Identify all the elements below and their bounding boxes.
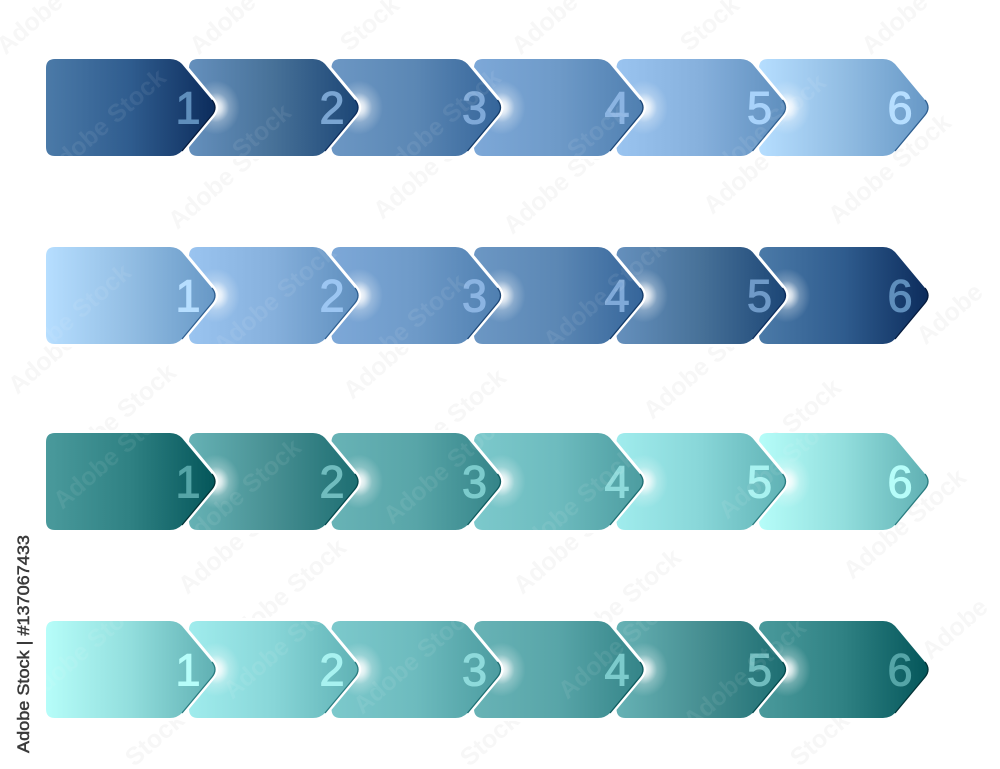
arrow 5 bbox=[616, 59, 810, 156]
arrow 5: 5 bbox=[747, 270, 772, 322]
arrow 2 bbox=[189, 621, 383, 718]
arrow 2 bbox=[189, 59, 383, 156]
watermark layer on background: Adobe Stock bbox=[368, 103, 502, 225]
watermark layer on background: Adobe Stock bbox=[3, 278, 137, 400]
arrow 6 bbox=[759, 247, 928, 344]
arrow 3 bbox=[332, 247, 526, 344]
arrow 3: 3 bbox=[462, 644, 487, 696]
arrow 5 bbox=[616, 433, 810, 530]
arrow 3: 3 bbox=[462, 456, 487, 508]
arrow 1: 1 bbox=[175, 644, 201, 696]
watermark layer on background: Adobe Stock bbox=[173, 478, 307, 600]
watermark layer on background: Adobe Stock bbox=[508, 478, 642, 600]
watermark layer on arrows: Adobe Stock bbox=[373, 63, 507, 185]
arrow 1: 1 bbox=[175, 456, 201, 508]
arrow 6: 6 bbox=[887, 644, 913, 696]
row 1: blue arrows darkening to the left bbox=[46, 59, 928, 156]
arrow 1: 1 bbox=[175, 270, 201, 322]
watermark layer on background: Adobe Stock bbox=[713, 373, 847, 495]
watermark layer on arrows: Adobe Stock bbox=[678, 613, 812, 735]
row 3: teal arrows darkening to the left bbox=[46, 433, 928, 530]
arrow 5 bbox=[616, 621, 810, 718]
watermark layer on arrows bbox=[3, 63, 847, 735]
watermark layer on arrows: Adobe Stock bbox=[553, 583, 687, 705]
watermark layer on background: Adobe Stock bbox=[163, 113, 297, 235]
arrow 2 bbox=[189, 433, 383, 530]
arrow 6: 6 bbox=[887, 456, 913, 508]
watermark layer on background: Adobe Stock bbox=[638, 303, 772, 425]
arrow 6: 6 bbox=[887, 82, 913, 134]
arrow 4 bbox=[474, 621, 668, 718]
watermark layer on arrows: Adobe Stock bbox=[498, 98, 632, 220]
watermark layer on arrows: Adobe Stock bbox=[18, 588, 152, 710]
watermark layer on arrows: Adobe Stock bbox=[378, 408, 512, 530]
watermark layer on arrows: Adobe Stock bbox=[3, 258, 137, 380]
arrow 2: 2 bbox=[319, 270, 345, 322]
watermark layer on arrows: Adobe Stock bbox=[713, 403, 847, 525]
watermark layer on arrows: Adobe Stock bbox=[163, 98, 297, 220]
arrow 5: 5 bbox=[747, 644, 772, 696]
arrow 2: 2 bbox=[319, 644, 345, 696]
arrow 4 bbox=[474, 59, 668, 156]
watermark layer on arrows: Adobe Stock bbox=[348, 598, 482, 720]
arrow 1 bbox=[46, 433, 240, 530]
arrow 5: 5 bbox=[747, 82, 772, 134]
watermark layer on background: Adobe Stock bbox=[338, 283, 472, 405]
watermark layer on arrows: Adobe Stock bbox=[538, 233, 672, 355]
watermark layer on background: Adobe Stock bbox=[498, 118, 632, 240]
arrow 3 bbox=[332, 59, 526, 156]
watermark layer on arrows: Adobe Stock bbox=[508, 443, 642, 565]
arrow 3: 3 bbox=[462, 270, 487, 322]
arrow 6 bbox=[759, 621, 928, 718]
watermark layer on background: Adobe Stock bbox=[838, 463, 972, 585]
watermark layer on background: Adobe Stock bbox=[218, 533, 352, 655]
arrow 4 bbox=[474, 433, 668, 530]
watermark layer on arrows: Adobe Stock bbox=[173, 433, 307, 555]
watermark layer on background: Adobe Stock bbox=[48, 358, 182, 480]
arrow 4 bbox=[474, 247, 668, 344]
watermark layer on arrows: Adobe Stock bbox=[48, 393, 182, 515]
arrow 1: 1 bbox=[175, 82, 201, 134]
watermark layer on background: Adobe bbox=[916, 593, 993, 665]
arrow 1 bbox=[46, 247, 240, 344]
watermark layer on background: Adobe bbox=[911, 278, 988, 350]
arrow 2: 2 bbox=[319, 82, 345, 134]
arrow 4: 4 bbox=[604, 456, 630, 508]
watermark layer on arrows: Adobe Stock bbox=[208, 238, 342, 360]
row 4: teal arrows darkening to the right bbox=[46, 621, 928, 718]
arrow 1 bbox=[46, 59, 240, 156]
stock credit vertical text: Adobe Stock | #137067433 bbox=[14, 535, 33, 753]
arrow 4: 4 bbox=[604, 644, 630, 696]
watermark layer on arrows: Adobe Stock bbox=[338, 268, 472, 390]
arrow 6 bbox=[759, 59, 928, 156]
arrow 5 bbox=[616, 247, 810, 344]
arrow 1 bbox=[46, 621, 240, 718]
arrow 3 bbox=[332, 433, 526, 530]
watermark layer on arrows: Adobe Stock bbox=[38, 63, 172, 185]
arrow 6 bbox=[759, 433, 928, 530]
arrow 3 bbox=[332, 621, 526, 718]
arrow 4: 4 bbox=[604, 82, 630, 134]
arrow 3: 3 bbox=[462, 82, 487, 134]
arrow 6: 6 bbox=[887, 270, 913, 322]
row 2: blue arrows darkening to the right bbox=[46, 247, 928, 344]
watermark layer on arrows: Adobe Stock bbox=[698, 68, 832, 190]
arrow 5: 5 bbox=[747, 456, 772, 508]
arrow 4: 4 bbox=[604, 270, 630, 322]
watermark layer on background: Adobe Stock bbox=[378, 363, 512, 485]
watermark layer on arrows: Adobe Stock bbox=[218, 583, 352, 705]
watermark layer on background: Adobe Stock bbox=[553, 543, 687, 665]
watermark layer on background: Adobe Stock bbox=[823, 108, 957, 230]
watermark layer on background: Adobe Stock bbox=[698, 98, 832, 220]
arrow 2 bbox=[189, 247, 383, 344]
arrow 2: 2 bbox=[319, 456, 345, 508]
